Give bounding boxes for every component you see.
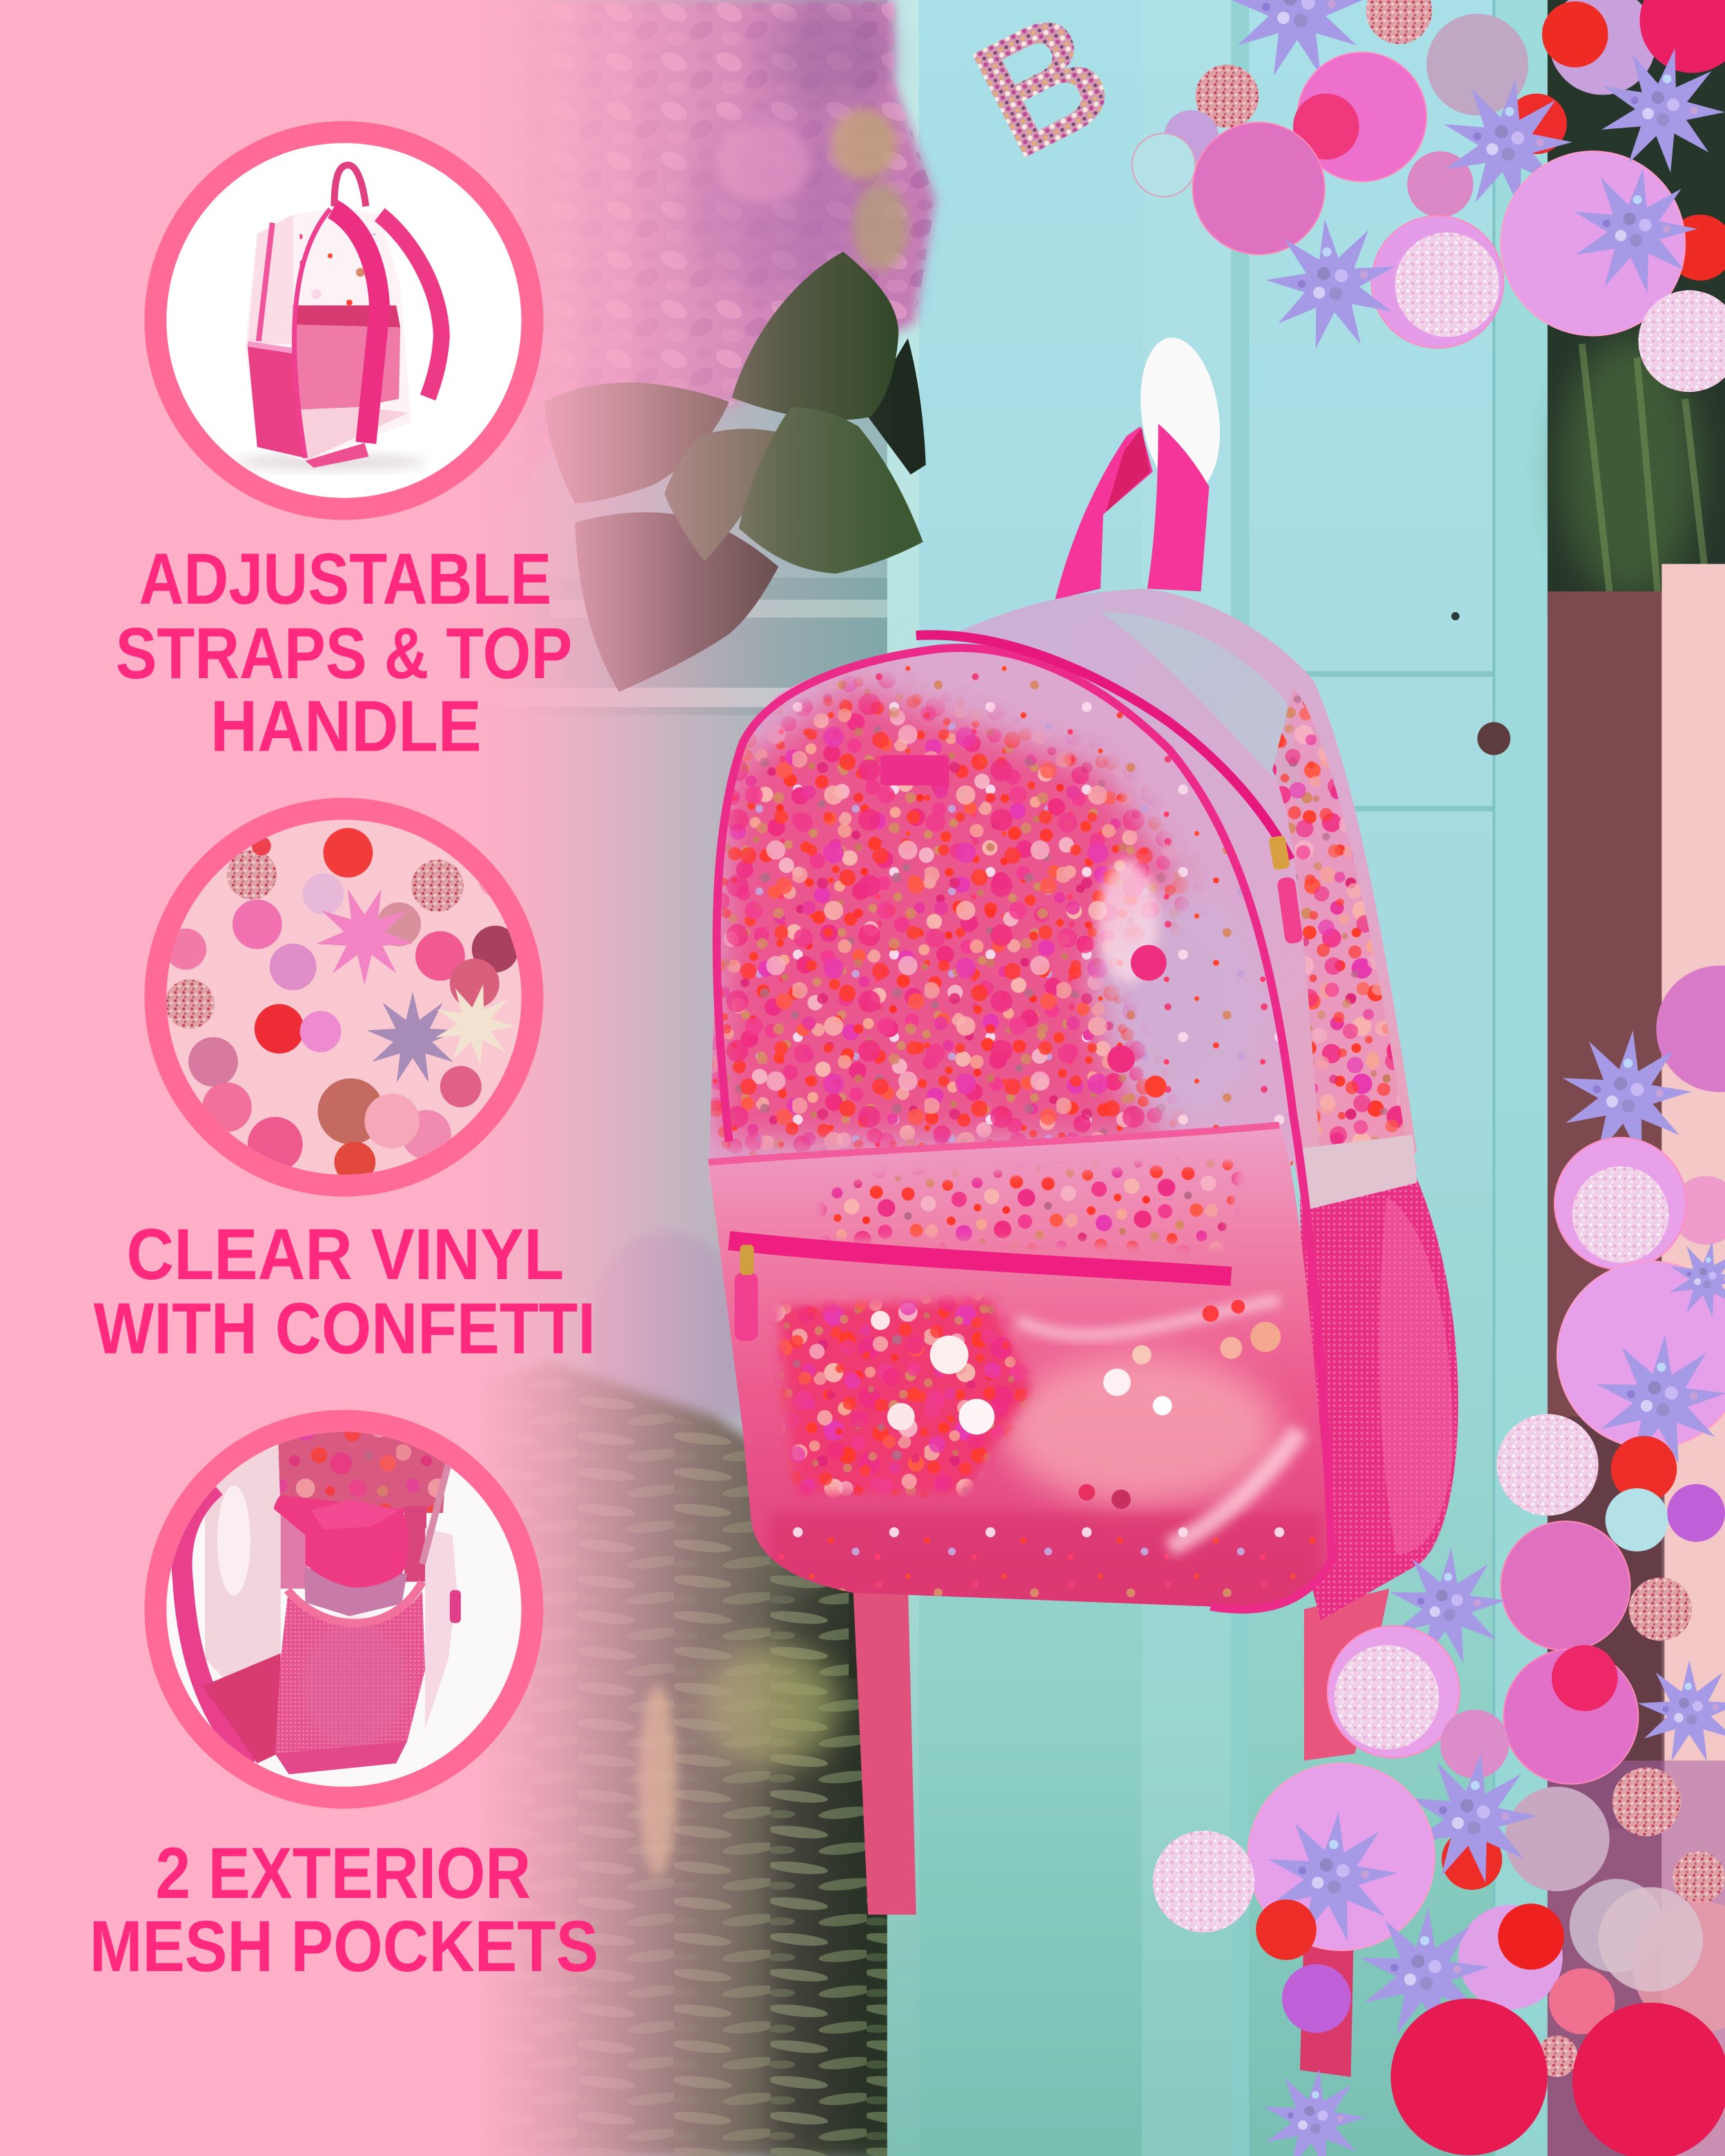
label 2 line 1: CLEAR VINYL (126, 1214, 564, 1295)
photo: hydrangeas and leaves (454, 0, 936, 692)
rear straps (853, 1582, 1390, 2077)
feature 3: thumbnail of bottle in mesh pocket (144, 1410, 543, 1809)
photo: teal locker (887, 0, 1548, 2156)
upper front confetti panel (708, 651, 1295, 1183)
side mesh pocket (1300, 1150, 1458, 1620)
photo: lockers and ferns on the left (454, 0, 918, 2156)
backpack (702, 424, 1458, 1623)
confetti decoration: top right (1132, 0, 1725, 392)
top and side gusset (949, 589, 1417, 1210)
label 3 line 1: 2 EXTERIOR (155, 1833, 531, 1914)
photo: dark garden and wall on the right (1548, 0, 1725, 2156)
confetti decoration: lower right (1153, 966, 1725, 2156)
label 1 line 2: STRAPS & TOP (115, 613, 572, 694)
label 1 line 3: HANDLE (210, 686, 482, 767)
feature 2: thumbnail of confetti close-up (144, 798, 543, 1196)
lower front pocket (702, 1125, 1348, 1623)
label 3 line 2: MESH POCKETS (90, 1906, 598, 1987)
top zipper (916, 635, 1290, 860)
front panel piping (717, 648, 1332, 1610)
label 2 line 2: WITH CONFETTI (94, 1289, 595, 1369)
top handle (1055, 424, 1209, 600)
front pocket zipper (729, 1240, 1231, 1276)
label 1 line 1: ADJUSTABLE (139, 539, 551, 620)
wall hook (1131, 333, 1230, 498)
feature 1: thumbnail of backpack rear view (144, 121, 543, 520)
zipper pullers (735, 835, 1303, 1341)
pink fade overlay (0, 0, 894, 2156)
